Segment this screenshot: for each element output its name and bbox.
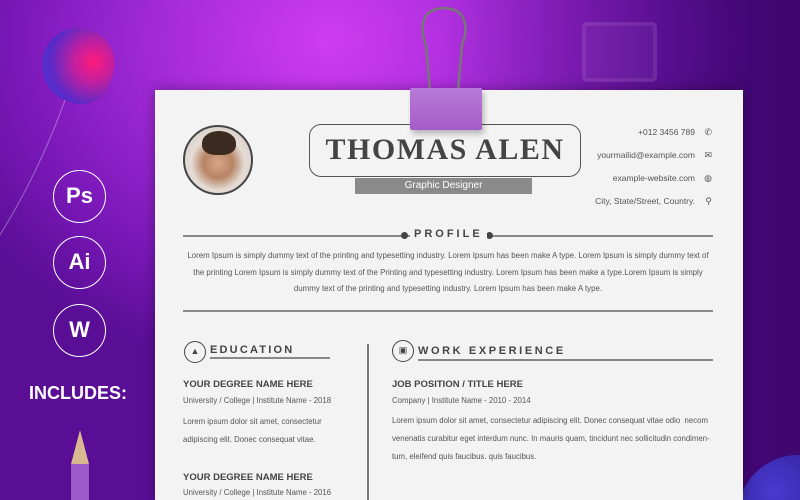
section: work experience [392, 340, 713, 461]
profile text: the printing Lorem Ipsum is simply dummy text of the Printing and typesetting industry. Lorem Ipsum has been make a type.Lorem Ipsum is simply [193, 268, 703, 276]
section: work experience: JOB POSITION / TITLE HERE [392, 379, 523, 390]
contacts: ◍ [704, 173, 712, 183]
job title bar [355, 178, 532, 194]
icon: binder clip [409, 6, 487, 137]
section: work experience: venenatis curabitur eget interdum nunc. In mauris quam, tincidunt nec sollicitudin condimen- [392, 434, 710, 443]
heading: work experience: WORK EXPERIENCE [418, 345, 566, 357]
profile text: dummy text of the printing and typesetting industry. Lorem Ipsum has been make A type. [294, 284, 602, 293]
heading: profile [183, 228, 713, 240]
section: work experience: tum, eleifend quis faucibus. quis faucibus. [392, 452, 536, 461]
section: work experience: Lorem ipsum dolor sit amet, consectetur adipiscing elit. Donec consequat vitae odio necom [392, 416, 708, 425]
section: education: adipiscing elit. Donec consequat vitae. [183, 435, 316, 444]
heading: education: EDUCATION [210, 344, 294, 356]
job title bar: Graphic Designer [405, 180, 482, 191]
section: education: University / College | Institute Name - 2018 [183, 396, 331, 405]
heading: profile: PROFILE [414, 228, 483, 240]
contacts [595, 127, 712, 206]
icon: Ai: Ai [68, 249, 90, 274]
contacts: +012 3456 789 [638, 127, 695, 137]
section: education: YOUR DEGREE NAME HERE [183, 472, 313, 483]
section: education [183, 341, 331, 497]
icon: graduation cap [184, 341, 206, 363]
section: education: University / College | Institute Name - 2016 [183, 488, 331, 497]
contacts: City, State/Street, Country. [595, 196, 695, 206]
name box [309, 124, 581, 177]
decoration: newspaper icon [582, 22, 657, 82]
icon: Ai [53, 236, 106, 289]
icon: Ps [53, 170, 106, 223]
profile text [187, 251, 709, 293]
icon: W: W [69, 317, 90, 342]
icon: graduation cap: ▲ [191, 346, 199, 356]
section: work experience: Company | Institute Name - 2010 - 2014 [392, 396, 531, 405]
contacts: ✉ [704, 150, 712, 160]
icon: briefcase: ▣ [399, 345, 407, 355]
contacts: yourmailid@example.com [597, 150, 695, 160]
profile text: Lorem Ipsum is simply dummy text of the printing and typesetting industry. Lorem Ipsum has been make A type. Lorem Ipsum is simply dummy text of [187, 251, 709, 260]
contacts: ✆ [704, 127, 712, 137]
icon: briefcase [392, 340, 414, 362]
contacts: ⚲ [705, 196, 712, 206]
contacts: example-website.com [613, 173, 695, 183]
paper: resume [155, 90, 743, 500]
decoration: balloon string [0, 100, 66, 236]
section: education: Lorem ipsum dolor sit amet, consectetur [183, 417, 322, 426]
section: education: YOUR DEGREE NAME HERE [183, 379, 313, 390]
icon: balloon [34, 20, 122, 111]
photo [183, 125, 253, 195]
decoration: bottom right sphere [743, 455, 800, 500]
icon: Ps: Ps [66, 183, 93, 208]
icon: W [53, 304, 106, 357]
text: includes: INCLUDES: [29, 383, 127, 403]
icon: pencil [71, 430, 89, 500]
name box: THOMAS ALEN [325, 133, 565, 166]
